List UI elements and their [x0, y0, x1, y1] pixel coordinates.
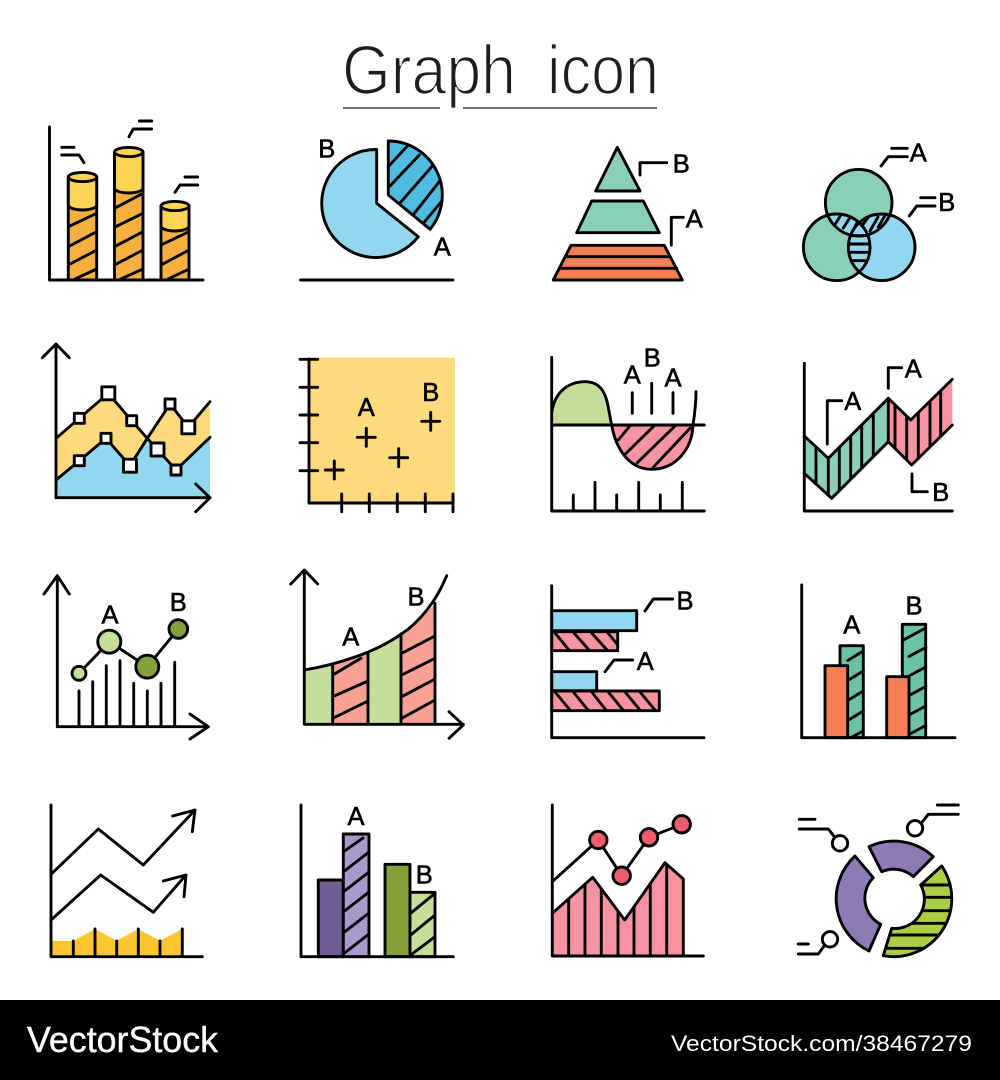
title: Graph — [342, 31, 516, 109]
icon: area under curve chart: A — [342, 624, 359, 652]
icon: donut chart — [798, 805, 960, 957]
icon: band line chart: A — [844, 388, 861, 416]
icon: band line chart: A — [905, 355, 922, 383]
icon: pie chart — [300, 136, 453, 280]
icon: horizontal bar chart: A — [637, 648, 654, 676]
icon: pyramid chart: A — [686, 205, 703, 233]
icon: venn diagram: A — [910, 140, 927, 168]
icon: band line chart: B — [932, 479, 949, 507]
footer bar: VectorStock.com/38467279 — [671, 1031, 972, 1056]
icon: scatter plot: A — [358, 394, 375, 422]
icon: area under curve chart: B — [407, 584, 425, 612]
icon: pyramid chart: B — [673, 151, 690, 179]
icon: wave chart: A — [664, 365, 682, 393]
icon: grouped bar chart: B — [905, 592, 923, 620]
footer bar: VectorStock — [27, 1019, 219, 1060]
icon: grouped bar chart — [802, 585, 955, 738]
icon: line over pink area chart — [552, 805, 703, 956]
icon: wave chart: B — [644, 345, 661, 373]
icon: venn diagram — [803, 140, 955, 281]
icon: horizontal bar chart: B — [676, 587, 694, 615]
icon: pie chart: A — [434, 234, 451, 262]
icon: dot line chart: A — [101, 601, 119, 629]
icon: horizontal bar chart — [552, 586, 704, 738]
icon: dot line chart: B — [170, 589, 187, 617]
icon: wave chart: A — [624, 361, 641, 389]
title: icon — [547, 31, 659, 109]
title — [342, 31, 659, 109]
icon: band line chart — [804, 355, 952, 511]
icon: wave chart — [552, 345, 704, 511]
icon: area chart with square markers — [42, 344, 210, 512]
icon: dot line chart — [44, 576, 208, 739]
icon: scatter plot — [300, 358, 455, 512]
icon: pyramid chart — [553, 147, 703, 280]
icon: purple and green bar chart: A — [347, 803, 365, 831]
footer bar — [0, 1000, 1000, 1080]
icon: pie chart: B — [318, 136, 335, 164]
icon: cylinder bar chart — [50, 121, 203, 280]
icon: grouped bar chart: A — [843, 611, 860, 639]
icon: area under curve chart — [291, 570, 463, 738]
icon: venn diagram: B — [938, 189, 955, 217]
icon: purple and green bar chart: B — [416, 861, 433, 889]
icon: purple and green bar chart — [301, 803, 453, 957]
icon: trend arrows chart — [51, 805, 202, 957]
icon: scatter plot: B — [422, 379, 439, 407]
